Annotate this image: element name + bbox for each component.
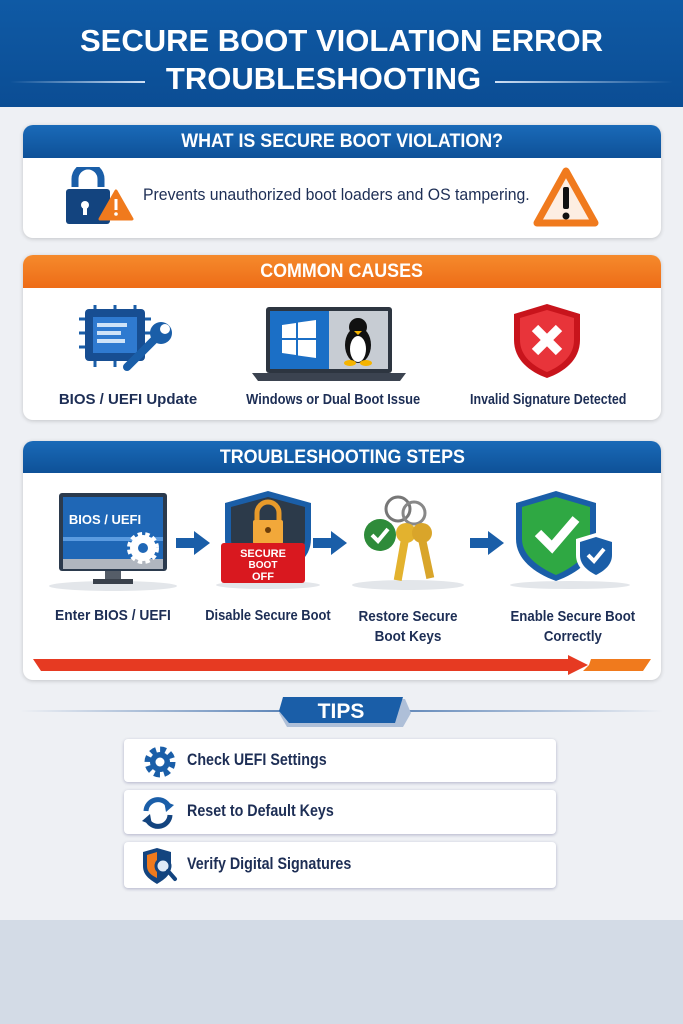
arrow — [313, 531, 347, 555]
label: Restore Secure — [358, 608, 458, 625]
cause: windows or dual boot — [246, 307, 420, 408]
panel heading: WHAT IS SECURE BOOT VIOLATION? — [181, 131, 503, 152]
panel: what is secure boot violation — [23, 125, 661, 238]
icon: warning triangle — [534, 168, 598, 226]
label: Invalid Signature Detected — [470, 391, 626, 408]
panel heading — [23, 441, 661, 473]
label: Enable Secure Boot — [511, 608, 635, 625]
step 1: enter bios — [49, 493, 177, 624]
cause: bios update — [59, 305, 197, 408]
label: Enter BIOS / UEFI — [55, 607, 171, 624]
icon: refresh — [142, 797, 174, 829]
label: Disable Secure Boot — [205, 607, 331, 624]
title: TROUBLESHOOTING — [166, 61, 481, 96]
icon: shield lock secure boot off: BOOT — [249, 560, 277, 571]
icon: red shield with x — [514, 304, 580, 378]
tips label: TIPS — [318, 700, 364, 723]
description text: Prevents unauthorized boot loaders and OS tampering. — [143, 185, 530, 204]
icon: monitor bios: BIOS / UEFI — [69, 512, 141, 527]
label: BIOS / UEFI Update — [59, 391, 197, 408]
icon: chip with wrench — [79, 305, 172, 371]
tips label — [279, 697, 411, 727]
step 3: restore keys — [352, 496, 464, 645]
icon: laptop with windows and tux — [252, 307, 406, 381]
tip: reset keys: Reset to Default Keys — [187, 801, 334, 820]
label: Correctly — [544, 628, 602, 645]
icon: monitor bios — [49, 493, 177, 591]
progress arrow — [33, 655, 651, 675]
icon: green shield with check — [510, 491, 630, 589]
cause: invalid signature — [470, 304, 626, 408]
tip: check uefi settings: Check UEFI Settings — [187, 750, 327, 769]
step 2: disable secure boot — [205, 491, 331, 624]
icon: gear — [144, 746, 176, 778]
step 4: enable secure boot — [510, 491, 635, 645]
label: Boot Keys — [375, 628, 441, 645]
panel heading: TROUBLESHOOTING STEPS — [219, 447, 465, 468]
icon: shield lock secure boot off: OFF — [252, 571, 274, 583]
panel heading: COMMON CAUSES — [261, 261, 423, 282]
icon: keys with check — [352, 496, 464, 590]
arrow — [470, 531, 504, 555]
tip: verify signatures: Verify Digital Signatures — [187, 854, 351, 873]
icon: shield magnifier — [143, 848, 178, 884]
label — [358, 608, 458, 645]
icon: padlock with warning — [66, 167, 134, 224]
icon: shield lock secure boot off — [216, 491, 320, 589]
title — [80, 23, 603, 96]
header banner — [0, 0, 683, 107]
icon: shield lock secure boot off: SECURE — [240, 548, 286, 560]
panel heading — [23, 255, 661, 288]
footer band — [0, 920, 683, 1024]
tip: check uefi settings — [124, 739, 556, 782]
tip: reset keys — [124, 790, 556, 834]
arrow — [176, 531, 210, 555]
tip: verify signatures — [124, 842, 556, 888]
title: SECURE BOOT VIOLATION ERROR — [80, 23, 603, 58]
panel heading — [23, 125, 661, 158]
label: Windows or Dual Boot Issue — [246, 391, 420, 408]
panel: troubleshooting steps — [23, 441, 661, 680]
label — [511, 608, 635, 645]
tips header — [35, 697, 648, 727]
panel: common causes — [23, 255, 661, 420]
